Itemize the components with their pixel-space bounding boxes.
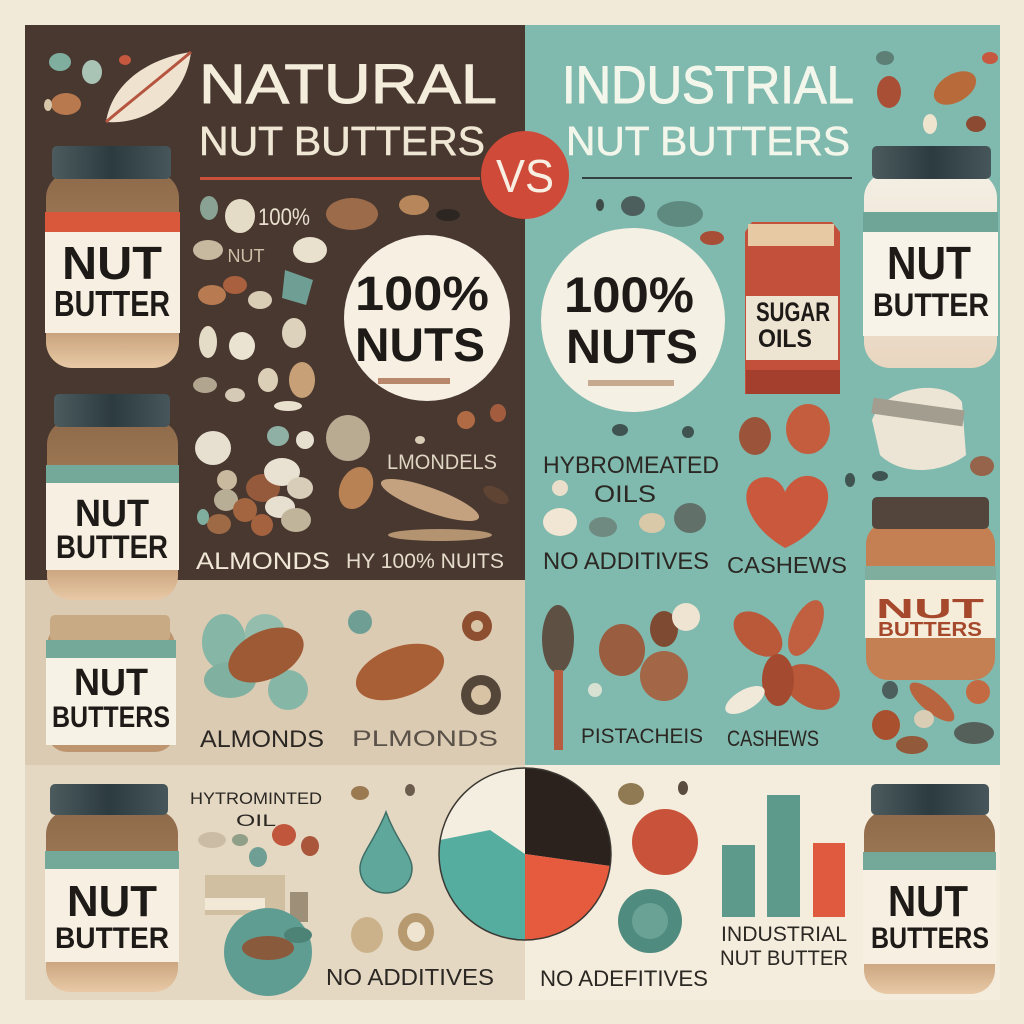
label: plmonds: PLMONDS xyxy=(352,726,498,751)
jar: natural 2: NUT xyxy=(75,493,149,535)
label: industrial nut butter: NUT BUTTER xyxy=(720,947,848,970)
title: natural nut butters: NUT BUTTERS xyxy=(199,118,485,164)
title: industrial nut butters xyxy=(562,56,854,164)
panel: bottom right xyxy=(525,765,1000,1000)
label: hydrogenated oil bottom: HYTROMINTED xyxy=(190,789,322,808)
panel: natural beige row xyxy=(25,580,525,765)
jar: natural 3: NUT xyxy=(74,662,148,704)
label: cashews: CASHEWS xyxy=(727,726,819,751)
label: industrial nut butter: INDUSTRIAL xyxy=(721,923,847,946)
label: hydrogenated oil bottom: OIL xyxy=(236,811,276,830)
jar: industrial 2 xyxy=(865,497,996,680)
jar: industrial 1 xyxy=(863,146,998,368)
jar: natural 3 xyxy=(46,615,176,752)
icon: sugar oils carton xyxy=(745,222,840,394)
callout: natural 100% nuts xyxy=(344,235,510,401)
icon: sugar oils carton: OILS xyxy=(758,325,812,353)
jar: industrial 3: BUTTERS xyxy=(871,922,989,955)
icons: natural right seeds xyxy=(332,404,512,541)
jar: industrial 2: BUTTERS xyxy=(878,619,982,641)
icon: water drop xyxy=(360,812,412,893)
icon: heart xyxy=(746,476,828,548)
label: hydrogenated oils: HYBROMEATED xyxy=(543,452,719,479)
divider: natural red rule xyxy=(200,177,480,180)
icons: top right nuts xyxy=(876,51,998,134)
icon: sugar oils carton: SUGAR xyxy=(756,297,830,327)
jar: industrial 3: NUT xyxy=(888,877,968,926)
panel: natural dark background xyxy=(25,25,525,580)
label: no additives bottom right: NO ADEFITIVES xyxy=(540,966,708,991)
label: pistachios: PISTACHEIS xyxy=(581,725,703,748)
icons: teal middle nuts xyxy=(543,404,855,537)
icon: almond xyxy=(348,610,501,715)
title: natural nut butters: NATURAL xyxy=(199,52,497,115)
jar: natural 1: NUT xyxy=(62,237,162,289)
label: almonds beige: ALMONDS xyxy=(200,726,324,753)
callout: industrial 100% nuts: 100% xyxy=(564,267,694,323)
panel: bottom left xyxy=(25,765,525,1000)
label: no additives bottom left: NO ADDITIVES xyxy=(326,964,494,990)
label: hydrogenated oils: OILS xyxy=(594,481,656,508)
label: lmondels: LMONDELS xyxy=(387,451,497,474)
label: hydrogenated oils xyxy=(543,452,719,508)
icons: small nuts bottom center xyxy=(351,784,434,953)
icons: natural nut scatter upper: 100% xyxy=(258,204,310,231)
pie chart xyxy=(439,768,611,940)
jar: industrial 3 xyxy=(863,784,996,994)
icon: white pouch xyxy=(871,388,994,481)
callout: industrial 100% nuts: NUTS xyxy=(566,321,698,374)
title: natural nut butters xyxy=(199,52,497,164)
jar: natural 1 xyxy=(45,146,180,368)
vs badge xyxy=(481,131,569,219)
label: almonds dark: ALMONDS xyxy=(196,548,330,575)
jar: industrial 2: NUT xyxy=(876,593,984,624)
icon: leaf xyxy=(106,52,191,122)
jar: natural 4: NUT xyxy=(67,877,157,926)
jar: natural 4: BUTTER xyxy=(55,922,169,955)
icons: natural nut pile xyxy=(195,415,370,536)
label: industrial nut butter xyxy=(720,923,848,970)
jar: natural 2: BUTTER xyxy=(56,529,168,565)
label: hydrogenated oil bottom xyxy=(190,789,322,830)
icons: natural nut scatter upper: NUT xyxy=(228,246,264,266)
jar: industrial 1: NUT xyxy=(887,237,971,289)
icon: almond with leaves xyxy=(202,614,312,710)
jar: natural 4 xyxy=(45,784,179,992)
icon: cashew flower xyxy=(721,595,848,720)
vs badge: VS xyxy=(496,150,554,202)
icon: spoon xyxy=(542,605,574,750)
callout: natural 100% nuts: NUTS xyxy=(355,318,485,371)
icons: bottom right nuts xyxy=(618,781,698,953)
label: 100% nuts dark: HY 100% NUITS xyxy=(346,550,504,573)
jar: natural 3: BUTTERS xyxy=(52,701,170,734)
jar: natural 1: BUTTER xyxy=(54,283,170,324)
icons: natural nut scatter upper xyxy=(193,195,460,411)
callout: natural 100% nuts: 100% xyxy=(355,268,489,321)
divider: industrial dark rule xyxy=(582,177,852,179)
label: cashews teal: CASHEWS xyxy=(727,552,847,578)
icon: teal right nuts xyxy=(872,676,994,754)
icons: teal top scatter xyxy=(596,196,724,245)
icon: hazelnuts xyxy=(588,603,700,701)
bar chart xyxy=(722,795,845,917)
jar: industrial 1: BUTTER xyxy=(873,287,989,323)
title: industrial nut butters: NUT BUTTERS xyxy=(566,118,850,164)
title: industrial nut butters: INDUSTRIAL xyxy=(562,56,854,115)
label: no additives teal: NO ADDITIVES xyxy=(543,548,709,575)
panel: industrial teal background xyxy=(525,25,1000,765)
icons: bottom left mix xyxy=(198,824,319,996)
icons: top left nuts xyxy=(44,53,131,115)
callout: industrial 100% nuts xyxy=(541,228,725,412)
jar: natural 2 xyxy=(46,394,179,600)
